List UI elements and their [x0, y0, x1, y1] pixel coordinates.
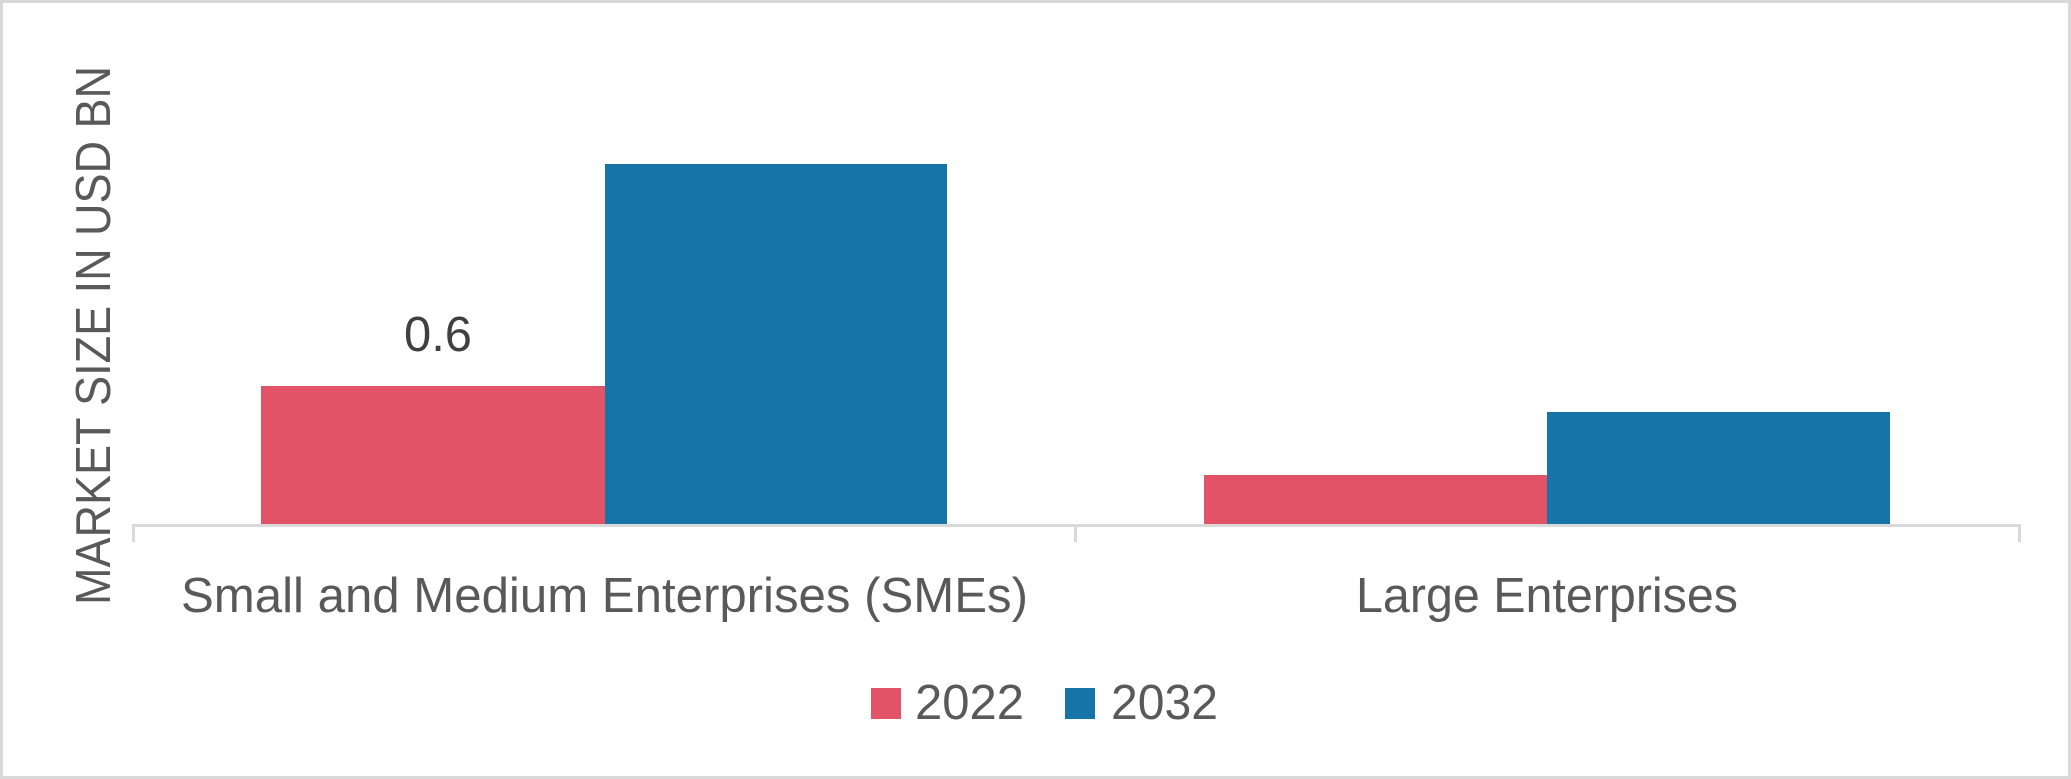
data label: 0.6: 0.6 — [404, 308, 472, 362]
legend label: 2032: 2032 — [1111, 676, 1218, 730]
bar: Large Enterprises 2032 — [1547, 412, 1890, 524]
bar: Large Enterprises 2022 — [1204, 475, 1547, 524]
legend — [871, 676, 1218, 730]
category label: Large Enterprises: Large Enterprises — [1356, 569, 1738, 623]
x axis — [134, 526, 2020, 542]
y axis title: MARKET SIZE IN USD BN — [67, 66, 121, 605]
legend label: 2022: 2022 — [915, 676, 1024, 730]
legend swatch: 2022 — [871, 688, 901, 719]
bar: SMEs 2022 — [261, 386, 605, 524]
bar: SMEs 2032 — [605, 164, 947, 524]
legend swatch: 2032 — [1065, 688, 1095, 719]
category label: SMEs: Small and Medium Enterprises (SMEs) — [181, 569, 1028, 623]
